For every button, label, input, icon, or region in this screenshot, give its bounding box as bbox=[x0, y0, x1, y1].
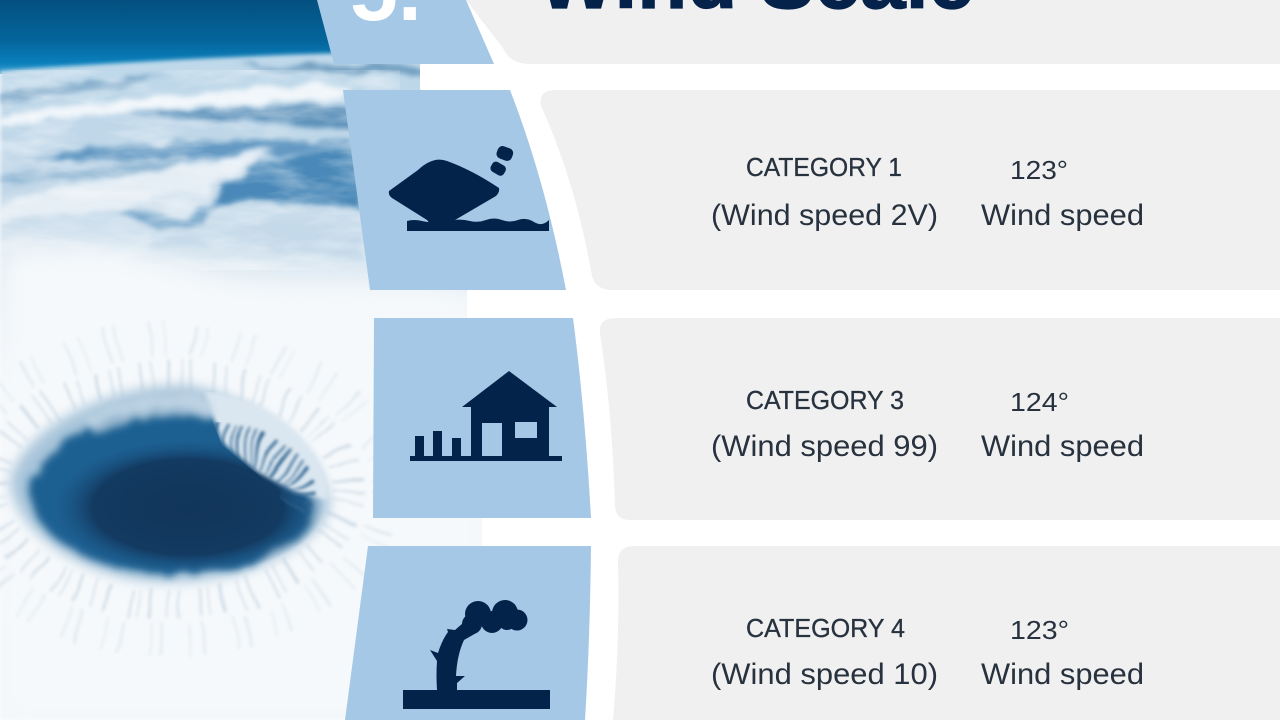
white backing behind panels bbox=[420, 0, 1280, 720]
category label 3: CATEGORY 3 bbox=[746, 387, 904, 415]
wind speed value 1: (Wind speed 2V) bbox=[711, 199, 938, 232]
angle 4: 123° bbox=[1010, 615, 1069, 645]
cloud layer bbox=[0, 50, 520, 720]
icon: bent tree bbox=[403, 600, 550, 709]
background: hurricane satellite photo bbox=[0, 0, 520, 720]
angle 1: 123° bbox=[1010, 155, 1068, 185]
icon: damaged house bbox=[410, 371, 562, 461]
eye inner wall bbox=[30, 408, 313, 574]
card 3 bbox=[600, 318, 1280, 520]
broken cloud clusters bbox=[118, 194, 364, 262]
dense white cloud mass bbox=[0, 245, 480, 720]
sky above the horizon bbox=[0, 0, 520, 74]
eye top rim streaks bbox=[85, 394, 215, 435]
card 4 bbox=[613, 546, 1280, 720]
icon tab 1 bbox=[343, 90, 566, 290]
row: category 3 bbox=[373, 318, 1280, 520]
category label 4: CATEGORY 4 bbox=[746, 615, 905, 643]
icon tab 4 bbox=[345, 546, 591, 720]
hurricane eye bbox=[10, 385, 330, 582]
row: category 1 bbox=[343, 90, 1280, 290]
eyewall cloud streaks bbox=[205, 392, 328, 512]
icon: capsizing ship bbox=[389, 145, 549, 231]
bright cloud streaks bbox=[0, 84, 350, 220]
wind speed value 4: (Wind speed 10) bbox=[711, 658, 938, 691]
wind speed value 3: (Wind speed 99) bbox=[711, 430, 938, 463]
wind speed label 1: Wind speed bbox=[981, 199, 1144, 232]
icon tab 3 bbox=[373, 318, 591, 518]
panel: title row bbox=[317, 0, 1280, 64]
turbulent cloud texture bbox=[0, 70, 400, 270]
row: category 4 bbox=[345, 546, 1280, 720]
wind speed label 4: Wind speed bbox=[981, 658, 1144, 691]
title card bbox=[466, 0, 1280, 64]
upper cloud bands bbox=[0, 65, 430, 182]
deep blue ocean gap bbox=[205, 148, 362, 210]
spiral rain band streaks bbox=[0, 340, 388, 640]
card 1 bbox=[541, 90, 1280, 290]
angle 3: 124° bbox=[1010, 387, 1069, 417]
eye outer halo bbox=[10, 385, 330, 582]
wind speed label 3: Wind speed bbox=[981, 430, 1144, 463]
eye dark core bbox=[52, 439, 324, 575]
category label 1: CATEGORY 1 bbox=[746, 154, 902, 182]
number tab bbox=[317, 0, 494, 64]
